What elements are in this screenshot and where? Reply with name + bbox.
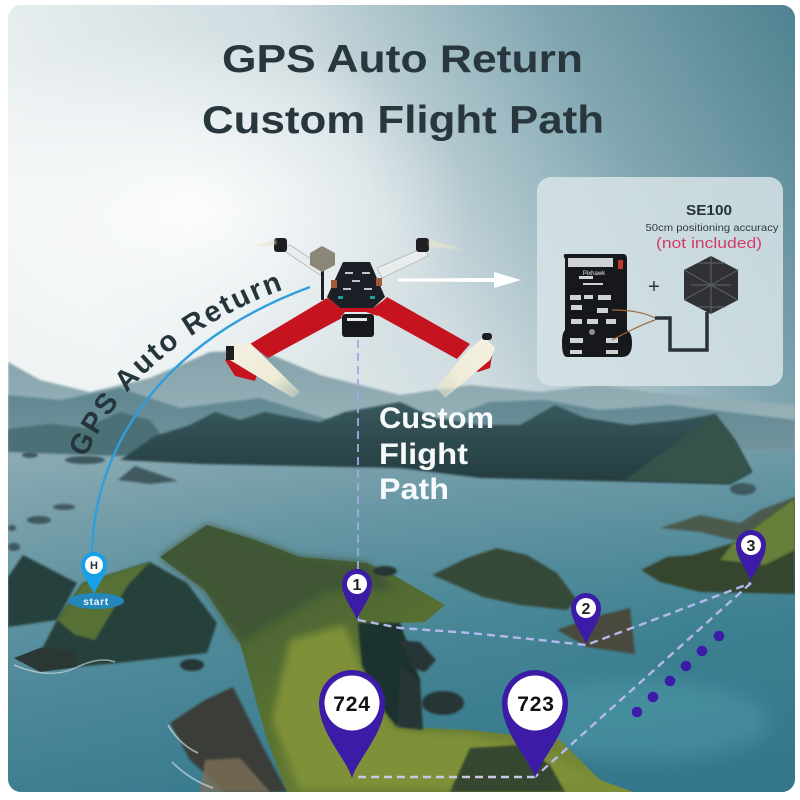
waypoint pin 723: 723	[517, 693, 555, 716]
GPS mast	[321, 262, 324, 300]
top right island	[660, 497, 795, 540]
sand cove	[200, 758, 270, 792]
plus sign: +	[648, 276, 660, 298]
H letter: H	[90, 560, 98, 572]
label: not included: (not included)	[656, 235, 762, 252]
title	[202, 38, 604, 142]
left hill foliage	[57, 562, 150, 640]
ridge slope	[625, 414, 752, 484]
front motor right	[482, 333, 492, 340]
label: SE100: SE100	[686, 202, 732, 219]
rear arm right	[377, 247, 428, 278]
connecting wires	[612, 310, 655, 340]
rear motors	[274, 238, 429, 252]
main green island	[160, 525, 633, 792]
flight controller board: Pixhawk	[583, 271, 606, 277]
waypoint pin 3	[736, 530, 766, 581]
left hill	[17, 562, 217, 667]
ridge dark forest	[160, 525, 395, 643]
rock outcrop shoreline	[14, 648, 78, 672]
far left rock	[8, 555, 77, 627]
rear arm left	[280, 245, 325, 275]
cove surf	[168, 725, 213, 788]
label: Custom Flight Path	[379, 402, 494, 506]
GPS return arc	[92, 287, 310, 556]
shore surf	[14, 660, 115, 673]
dot trail	[632, 631, 724, 717]
waypoint pin 2	[571, 593, 601, 644]
side panel: SE100 module	[537, 177, 783, 386]
far left headland	[8, 412, 180, 456]
dark rocky cliff	[170, 687, 287, 792]
water shading	[8, 450, 795, 797]
H badge	[85, 556, 103, 574]
waypoint pin 3: 3	[747, 538, 756, 555]
label: positioning accuracy: 50cm positioning accuracy	[646, 222, 779, 234]
word: Flight: Flight	[379, 438, 468, 471]
right island green	[720, 498, 795, 565]
start text: start	[83, 596, 109, 608]
camera mount	[342, 314, 374, 337]
right motor mount	[468, 356, 492, 372]
curved label: GPS Auto Return	[86, 284, 300, 458]
H pin	[81, 552, 107, 594]
main island shadow	[358, 623, 420, 727]
flight controller board	[562, 254, 632, 357]
curved text: GPS Auto Return	[71, 277, 282, 454]
red arm left	[250, 298, 342, 358]
left motor mount	[225, 354, 258, 381]
bright olive slope	[272, 625, 600, 790]
dark rocks in centre	[180, 566, 464, 730]
dashed flight path	[353, 340, 751, 777]
foreground dark rock	[450, 745, 565, 792]
GPS puck	[310, 246, 335, 272]
GPS module	[684, 256, 738, 314]
water highlight	[556, 681, 766, 760]
distant mountains	[8, 349, 795, 450]
front motor left	[226, 346, 234, 360]
waypoint pin 1: 1	[353, 577, 362, 594]
waypoint pin 2: 2	[582, 601, 591, 618]
waypoint pin 723	[502, 670, 568, 778]
word: Path: Path	[379, 473, 449, 506]
rock island 2	[557, 608, 635, 654]
GPS cable	[655, 312, 707, 350]
right island 3	[641, 498, 795, 594]
drone	[225, 238, 495, 398]
start pin	[68, 552, 124, 609]
title line 2: Custom Flight Path	[202, 99, 604, 142]
front propeller right	[436, 337, 495, 398]
central body	[327, 262, 385, 308]
water	[8, 450, 795, 797]
front propeller left	[228, 343, 300, 398]
waypoint pin 1	[342, 569, 372, 620]
red arm right	[372, 297, 470, 359]
sky glow	[50, 74, 427, 328]
sky	[8, 5, 795, 485]
title line 1: GPS Auto Return	[222, 38, 583, 81]
panel background	[537, 177, 783, 386]
start plate	[68, 593, 124, 609]
dark ridge	[120, 402, 752, 484]
waypoint pin 724: 724	[333, 693, 371, 716]
rear propellers	[252, 240, 465, 250]
waypoint pin 724	[319, 670, 385, 778]
centre red frame	[327, 297, 387, 320]
white arrow to module	[398, 272, 521, 288]
small islets	[8, 452, 756, 551]
centre island	[432, 548, 577, 610]
middle mountains	[8, 387, 795, 450]
word: Custom: Custom	[379, 402, 494, 435]
